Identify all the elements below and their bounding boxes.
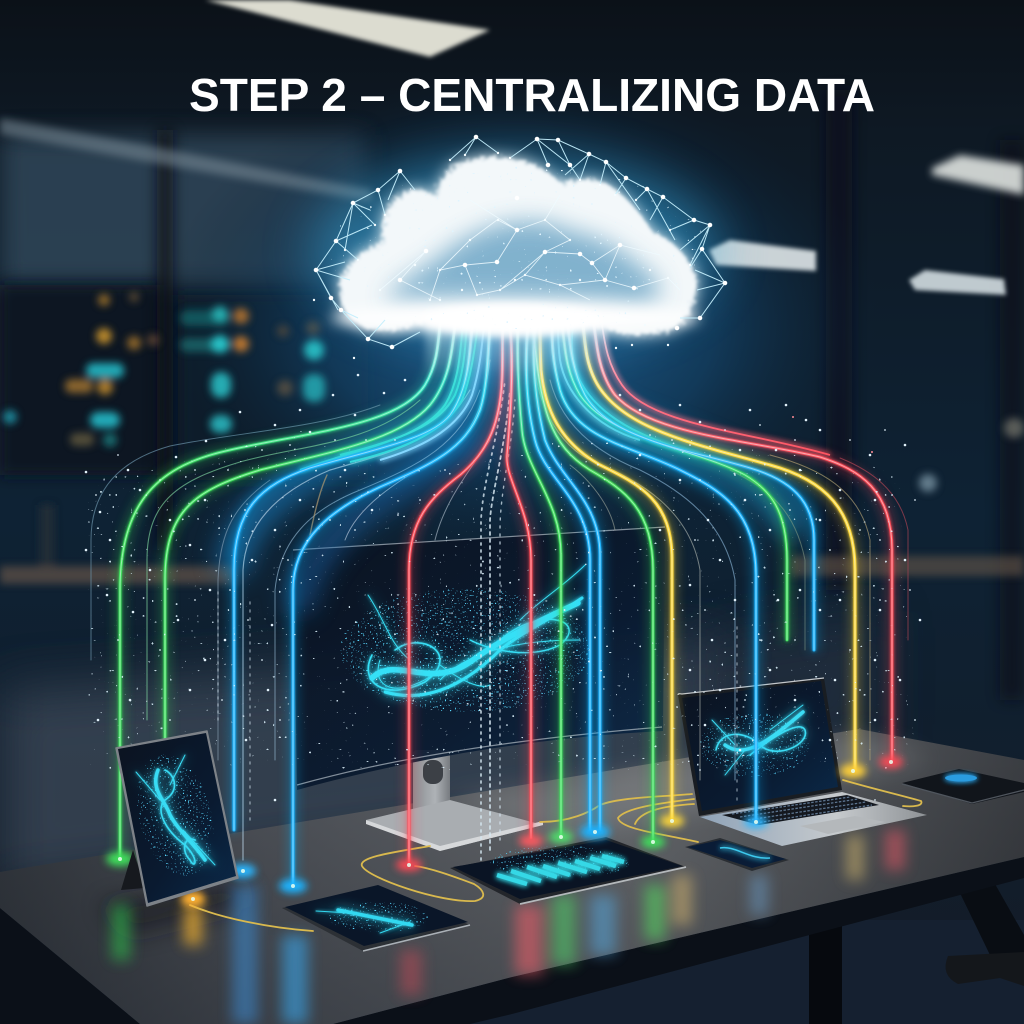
cloud base glow [330, 304, 700, 336]
laptop trackpad [800, 816, 885, 834]
desk shade [0, 729, 1024, 1024]
green data streams [120, 325, 787, 858]
landing nodes on desk [106, 756, 903, 907]
blue data streams [234, 325, 814, 885]
tablet particle spray [124, 746, 226, 884]
teal data streams [300, 325, 700, 470]
cloud inner shading [385, 221, 660, 302]
desk top surface [0, 729, 1024, 1024]
desk lip [333, 857, 1024, 1024]
cloud inner mesh [380, 195, 680, 300]
cloud halo [310, 155, 720, 345]
flat tablet front centre with bars [450, 837, 686, 904]
desk shadow under tablet [100, 880, 250, 935]
tablet swirl [136, 755, 215, 865]
laptop key rows [732, 797, 872, 823]
monitor frame [293, 527, 665, 785]
cloud small sparkles [314, 153, 690, 358]
particle dust [85, 430, 915, 770]
desk back highlight [450, 735, 930, 840]
blurred server LEDs [3, 292, 1024, 492]
ceiling lights [205, 0, 1024, 295]
flat tablet front left [282, 885, 470, 951]
laptop keyboard [722, 795, 879, 825]
desk light reflections [112, 830, 905, 1024]
laptop [678, 678, 927, 846]
cloud network lines [316, 137, 725, 347]
red data streams [409, 325, 892, 862]
extra red stream [602, 325, 830, 455]
tablet display [118, 733, 236, 903]
tablet body [116, 731, 238, 906]
cloud [310, 137, 725, 358]
notebook device right [902, 769, 1024, 804]
back tables in the office [0, 505, 1024, 584]
cloud nodes [316, 137, 725, 347]
smartphone [685, 838, 789, 871]
laptop screen [678, 678, 842, 816]
monitor particle spray [340, 588, 590, 712]
cloud sparkle grain [328, 165, 708, 335]
bars [497, 856, 624, 884]
laptop base [700, 792, 927, 846]
cloud body [340, 157, 696, 335]
tablet kickstand [121, 850, 145, 890]
desk edge [0, 908, 140, 1024]
yellow data streams [540, 325, 855, 818]
chair arm [946, 952, 1024, 986]
floating particles [86, 375, 920, 800]
monitor base [366, 800, 543, 851]
monitor screen [293, 527, 665, 790]
stream convergence glow [425, 316, 605, 376]
monitor data swirl [368, 565, 585, 696]
yellow cables on desk [190, 780, 921, 931]
laptop display [682, 681, 838, 811]
thin data threads [91, 360, 908, 860]
propped tablet left [116, 731, 238, 906]
falling data droplets [218, 380, 737, 860]
node halos [106, 756, 903, 907]
laptop swirl [712, 705, 805, 775]
node cores [120, 762, 891, 899]
title: STEP 2 – CENTRALIZING DATA [189, 69, 875, 121]
curved monitor [293, 527, 665, 851]
desk [0, 729, 1024, 1024]
desk front legs [809, 884, 1024, 1024]
light haze around data streams [234, 330, 790, 600]
monitor stand [366, 750, 543, 851]
stream bright cores [120, 325, 892, 885]
